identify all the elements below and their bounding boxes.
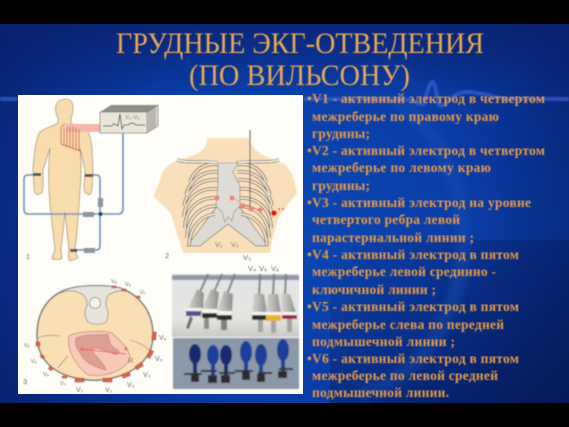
spine [60, 286, 131, 324]
wires [24, 133, 123, 250]
heart [68, 331, 130, 376]
lead V4: ключичной линии ; [312, 282, 436, 297]
lead V3: •V3 - активный электрод на уровне [307, 195, 531, 210]
bulb 5 [255, 344, 272, 382]
chest labels [165, 240, 279, 273]
panel: illustrations [18, 95, 303, 394]
lead V4 [307, 247, 519, 297]
text block: lead descriptions [307, 91, 545, 400]
lead V3 [307, 195, 531, 245]
sternum [216, 163, 240, 222]
title: (ПО ВИЛЬСОНУ) [189, 59, 410, 92]
section labels: V₈ [111, 279, 117, 285]
lead V6: межреберье по левой средней [312, 368, 498, 383]
lead V2 [307, 143, 545, 193]
photo: suction bulbs [173, 338, 299, 389]
lead V6: •V6 - активный электрод в пятом [307, 351, 519, 366]
chest labels: V₄ [248, 264, 256, 273]
label 1: 1 [26, 254, 30, 261]
section labels: V₄ [43, 372, 50, 378]
photo: ECG cables [172, 274, 299, 337]
cable: black 1 [202, 274, 222, 329]
lead V1: межреберье по правому краю [312, 109, 499, 124]
chest labels: V₅ [259, 264, 267, 273]
lead V5: •V5 - активный электрод в пятом [307, 299, 519, 314]
section labels: V₆ [159, 335, 167, 342]
costal cartilage [187, 205, 268, 246]
cable: crimson [281, 274, 297, 332]
clavicles [177, 160, 279, 163]
cable: black 2 [217, 274, 235, 330]
section labels: V₇ [140, 290, 146, 296]
lead V1 [307, 91, 545, 141]
lead V4: •V4 - активный электрод в пятом [307, 247, 519, 262]
lead V5: подмышечной линии ; [312, 334, 455, 349]
icon: thorax section [37, 286, 153, 380]
lead V1: •V1 - активный электрод в четвертом [307, 91, 545, 106]
red electrodes [36, 286, 156, 382]
lead V5: межреберье слева по передней [312, 317, 504, 332]
chest labels: V₁ [215, 240, 223, 249]
cable: yellow [266, 274, 281, 333]
chest lead fan [61, 124, 100, 151]
section labels: V₃ [127, 382, 135, 389]
title [116, 27, 484, 92]
section labels: 3 [23, 377, 27, 386]
lead V5 [307, 299, 519, 349]
section labels: V₈ [125, 282, 131, 288]
cable: dark [252, 274, 267, 332]
lead V1: грудины; [312, 126, 370, 141]
figure 1: body with electrodes and wires [24, 99, 158, 261]
electrode dots [214, 196, 262, 212]
icon: torso [153, 138, 297, 253]
bulb 3 [219, 345, 235, 383]
figure 2: chest and ribs [153, 130, 297, 273]
section labels: V₂ [105, 387, 113, 394]
cable: violet [186, 274, 208, 329]
section labels: V₅ [155, 356, 163, 363]
bulb 4 [235, 341, 253, 380]
ECG recorder [100, 105, 158, 133]
chest labels: V₂ [231, 240, 239, 249]
ribs [184, 164, 272, 245]
chest labels: V₃ [243, 253, 251, 262]
lead V2: •V2 - активный электрод в четвертом [307, 143, 545, 158]
lead V3: парастернальной линии ; [312, 230, 474, 245]
title: ГРУДНЫЕ ЭКГ-ОТВЕДЕНИЯ [116, 27, 484, 60]
electrode pointer [249, 130, 251, 208]
section labels: V₃ [60, 381, 66, 387]
lead V2: грудины; [312, 178, 370, 193]
lead V2: межреберье по левому краю [312, 160, 491, 175]
bulb 2 [201, 345, 219, 383]
bulb 6 [277, 339, 293, 378]
figure 3: chest cross-section: R [128, 356, 134, 365]
lead V4: межреберье левой срединно - [312, 264, 496, 279]
figure 3: chest cross-section [23, 279, 167, 394]
bulb 1 [184, 344, 202, 382]
chest labels: 2 [165, 251, 169, 260]
lead V6 [307, 351, 519, 400]
lead V6: подмышечной линии. [312, 385, 449, 400]
section labels: V₅ [31, 359, 37, 365]
section labels: V₁ [76, 387, 84, 394]
section labels: V₄ [143, 372, 151, 379]
section labels: V₆ [24, 343, 30, 349]
icon: human body [33, 99, 93, 261]
ECG recorder: V₁–V₆ [125, 115, 139, 121]
chest labels: V₆ [271, 264, 279, 273]
section labels [23, 279, 167, 394]
lead V3: четвертого ребра левой [312, 212, 460, 227]
figure 3: chest cross-section: + [124, 346, 128, 353]
